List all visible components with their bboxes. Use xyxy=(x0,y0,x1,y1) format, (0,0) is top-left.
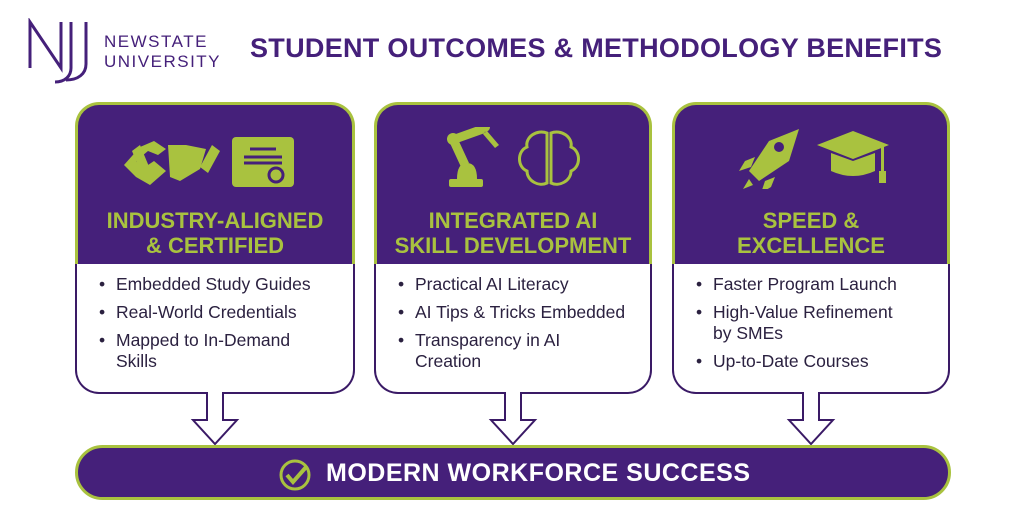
bullet list: Transparency in AI Creation xyxy=(415,330,560,371)
icon: check circle xyxy=(280,460,310,490)
bullet list xyxy=(672,264,950,394)
bullet list: Practical AI Literacy xyxy=(415,274,569,294)
banner: modern workforce success: MODERN WORKFORCE SUCCESS xyxy=(326,459,751,487)
logo xyxy=(28,18,221,84)
heading: INDUSTRY-ALIGNED xyxy=(107,208,323,233)
banner: modern workforce success xyxy=(75,445,951,500)
bullet list: Faster Program Launch xyxy=(713,274,897,294)
heading xyxy=(395,208,632,258)
arrows xyxy=(190,392,836,445)
bullet list: High-Value Refinement by SMEs xyxy=(713,302,893,343)
bullet list xyxy=(75,264,355,394)
heading: SPEED & xyxy=(763,208,859,233)
panel: industry-aligned xyxy=(75,102,355,394)
bullet list: Mapped to In-Demand Skills xyxy=(116,330,290,371)
panel: speed & excellence xyxy=(672,102,950,394)
bullet list: Up-to-Date Courses xyxy=(713,351,869,371)
icons: handshake and certificate xyxy=(124,137,294,187)
logo: NEWSTATE xyxy=(104,32,208,51)
heading: EXCELLENCE xyxy=(737,233,885,258)
title: STUDENT OUTCOMES & METHODOLOGY BENEFITS xyxy=(250,33,942,63)
heading xyxy=(737,208,885,258)
bullet list: AI Tips & Tricks Embedded xyxy=(415,302,625,322)
bullet list: Real-World Credentials xyxy=(116,302,297,322)
heading: SKILL DEVELOPMENT xyxy=(395,233,631,258)
heading: INTEGRATED AI xyxy=(429,208,597,233)
icons: rocket and graduation cap xyxy=(739,129,889,189)
heading: & CERTIFIED xyxy=(146,233,284,258)
icons: robot arm and brain xyxy=(447,127,580,187)
panel: AI skill development xyxy=(374,102,652,394)
bullet list xyxy=(374,264,652,394)
heading xyxy=(107,208,323,258)
bullet list: Embedded Study Guides xyxy=(116,274,311,294)
logo: UNIVERSITY xyxy=(104,52,221,71)
